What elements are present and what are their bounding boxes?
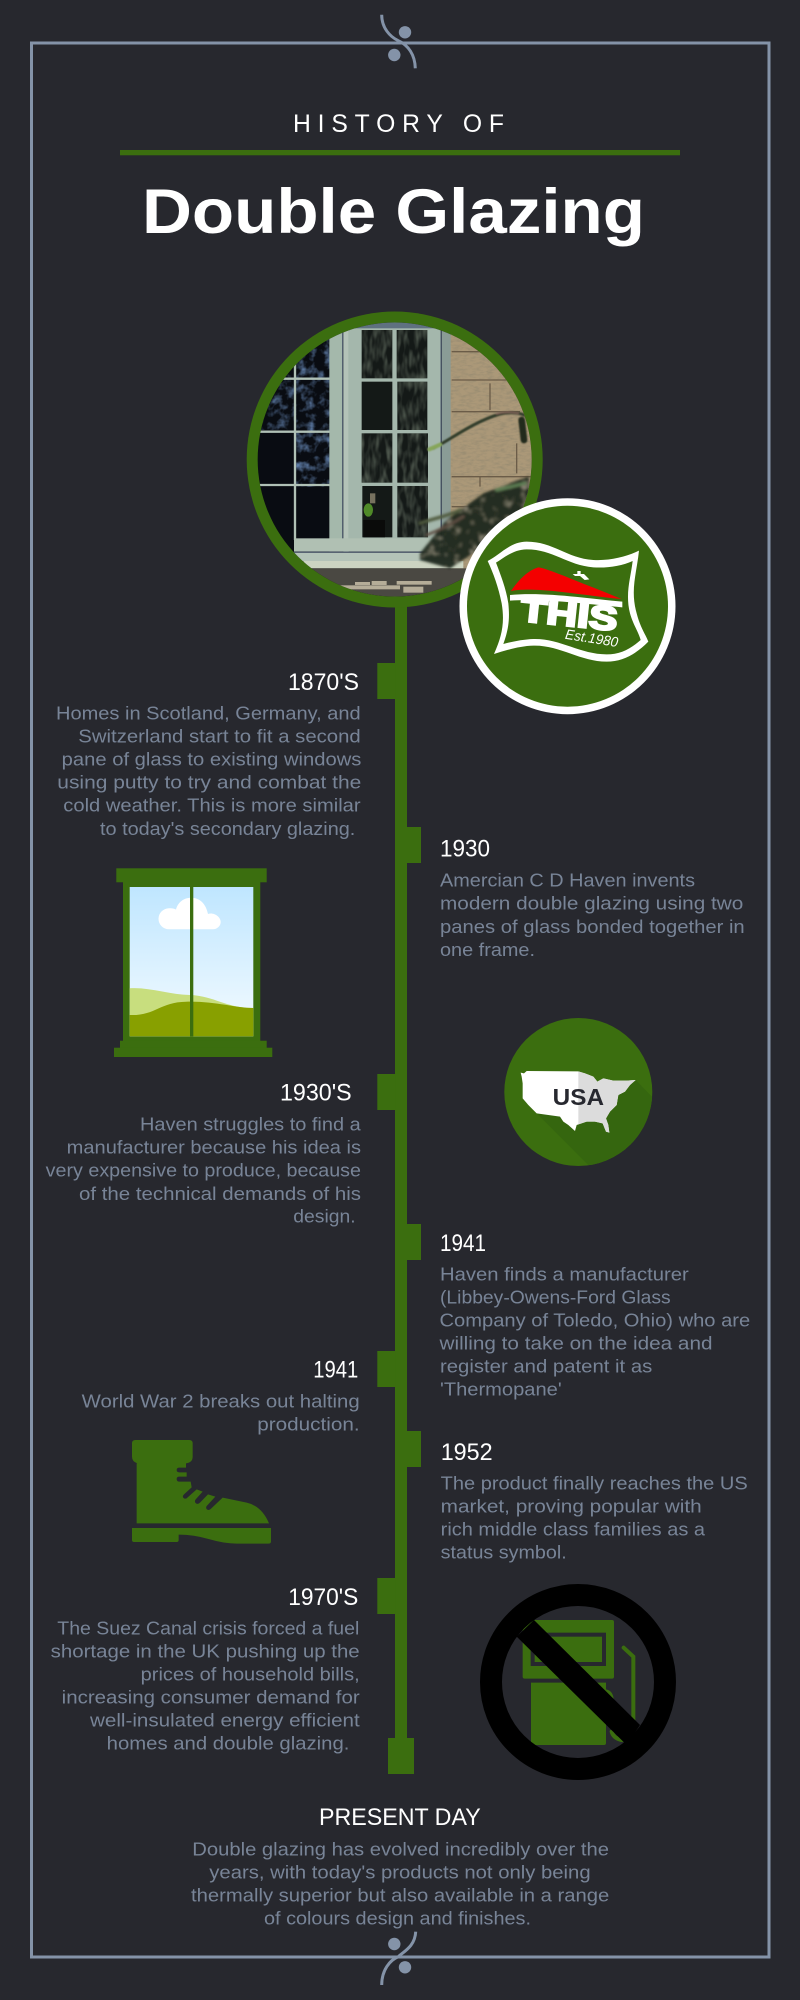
description bbox=[82, 1392, 360, 1434]
chimney bbox=[573, 571, 589, 580]
ornament: top knot bbox=[382, 15, 415, 68]
icon: USA map badge bbox=[504, 1018, 660, 1166]
description: Haven struggles to find a bbox=[140, 1115, 362, 1135]
year: 1941 bbox=[440, 1230, 486, 1257]
roof bbox=[511, 567, 622, 599]
entry: 1941 manufacturer bbox=[438, 1230, 750, 1400]
roof band bbox=[510, 594, 622, 607]
description: World War 2 breaks out halting bbox=[82, 1392, 360, 1412]
map label: USA bbox=[553, 1084, 604, 1110]
logo established date: Est.1980 bbox=[564, 626, 620, 650]
description: Company of Toledo, Ohio) who are bbox=[440, 1311, 750, 1331]
description: Double glazing has evolved incredibly over the bbox=[192, 1840, 609, 1860]
year: 1941 bbox=[313, 1357, 358, 1384]
icon: boot bbox=[132, 1440, 271, 1544]
timeline bbox=[377, 600, 421, 1774]
description bbox=[56, 703, 361, 839]
description: of the technical demands of his bbox=[79, 1184, 361, 1204]
description: willing to take on the idea and bbox=[438, 1334, 712, 1354]
entry: 1870's bbox=[56, 669, 361, 839]
description: Switzerland start to fit a second bbox=[78, 726, 361, 746]
description: increasing consumer demand for bbox=[62, 1687, 360, 1707]
description: register and patent it as bbox=[440, 1357, 652, 1377]
description: Homes in Scotland, Germany, and bbox=[56, 703, 361, 723]
photo: window in circle bbox=[247, 312, 543, 608]
description: Haven finds a manufacturer bbox=[440, 1264, 689, 1284]
description: production. bbox=[257, 1414, 360, 1434]
description: to today's secondary glazing. bbox=[100, 819, 355, 839]
prohibition ring bbox=[491, 1595, 665, 1769]
icon: no fuel sign bbox=[491, 1595, 665, 1769]
description: prices of household bills, bbox=[141, 1664, 360, 1684]
description: (Libbey-Owens-Ford Glass bbox=[440, 1288, 671, 1308]
description: design. bbox=[293, 1206, 356, 1226]
ornament: bottom knot bbox=[382, 1932, 416, 1985]
description: of colours design and finishes. bbox=[264, 1909, 531, 1929]
description: very expensive to produce, because bbox=[46, 1161, 361, 1181]
description bbox=[441, 1473, 748, 1562]
year: 1970'S bbox=[288, 1584, 358, 1611]
description bbox=[51, 1618, 360, 1753]
description: well-insulated energy efficient bbox=[89, 1710, 360, 1730]
flag outline bbox=[488, 542, 648, 662]
description: homes and double glazing. bbox=[107, 1733, 349, 1753]
description: status symbol. bbox=[441, 1542, 567, 1562]
entry: 1941 war bbox=[82, 1357, 360, 1434]
fuel pump bbox=[523, 1620, 633, 1745]
description: modern double glazing using two bbox=[440, 894, 743, 914]
logo name: THIS bbox=[519, 592, 619, 639]
entry: 1970's bbox=[51, 1584, 360, 1753]
description: rich middle class families as a bbox=[441, 1519, 706, 1539]
description: one frame. bbox=[440, 940, 535, 960]
description: pane of glass to existing windows bbox=[62, 750, 361, 770]
description: The product finally reaches the US bbox=[441, 1473, 748, 1493]
description: cold weather. This is more similar bbox=[63, 796, 361, 816]
year: 1930 bbox=[440, 836, 490, 863]
description: using putty to try and combat the bbox=[57, 772, 361, 792]
year: 1930'S bbox=[280, 1080, 352, 1107]
year: 1952 bbox=[441, 1439, 493, 1466]
description: Amercian C D Haven invents bbox=[440, 871, 695, 891]
description bbox=[440, 871, 745, 960]
logo: THIS badge bbox=[460, 498, 676, 714]
description: panes of glass bonded together in bbox=[440, 917, 745, 937]
description bbox=[46, 1115, 362, 1226]
description: years, with today's products not only being bbox=[209, 1863, 591, 1883]
heading: PRESENT DAY bbox=[319, 1804, 481, 1831]
description: 'Thermopane' bbox=[440, 1380, 562, 1400]
entry: 1930 bbox=[440, 836, 745, 960]
entry: 1930's bbox=[46, 1080, 362, 1226]
description: The Suez Canal crisis forced a fuel bbox=[57, 1618, 359, 1638]
description: shortage in the UK pushing up the bbox=[51, 1641, 360, 1661]
icon: window bbox=[114, 868, 272, 1057]
description bbox=[191, 1840, 609, 1929]
description bbox=[438, 1264, 750, 1400]
entry: present day bbox=[191, 1804, 609, 1929]
description: thermally superior but also available in a range bbox=[191, 1886, 609, 1906]
description: market, proving popular with bbox=[441, 1496, 702, 1516]
title: Double Glazing bbox=[142, 177, 645, 247]
description: manufacturer because his idea is bbox=[67, 1138, 361, 1158]
year: 1870'S bbox=[288, 669, 359, 696]
entry: 1952 bbox=[441, 1439, 748, 1562]
heading: history of: HISTORY OF bbox=[293, 111, 504, 138]
title underline bbox=[120, 150, 680, 155]
